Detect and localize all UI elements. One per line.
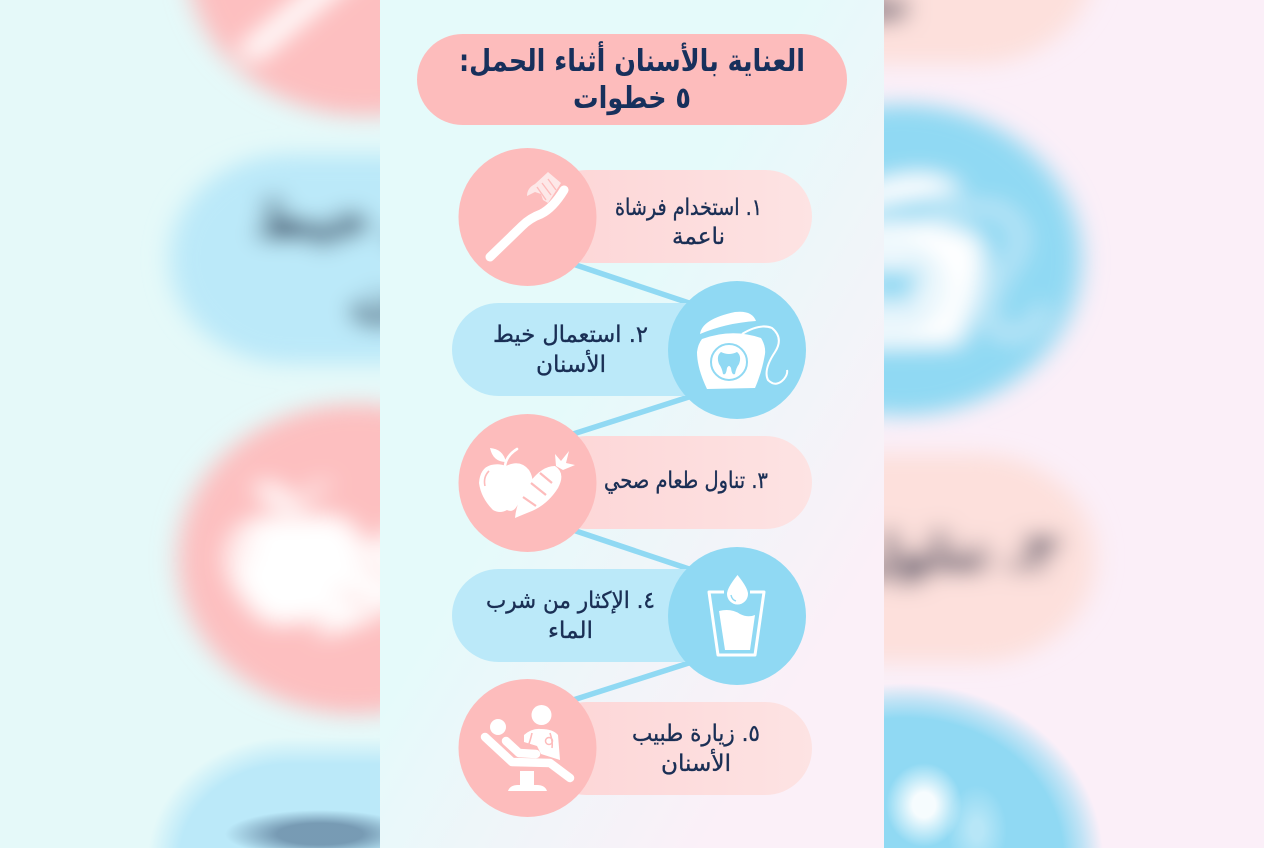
central panel: [380, 0, 884, 848]
blurred enlarged backdrop: [170, 0, 1095, 714]
icon: dental floss: [697, 312, 787, 389]
step 3 label: ٣. تناول طعام صحي: [604, 468, 768, 494]
step 2 label: ٢. استعمال خيط: [493, 322, 648, 348]
step 1 label: [540, 170, 812, 263]
step 4 circle: [668, 547, 806, 685]
step 4 label: ٤. الإكثار من شرب: [486, 588, 655, 614]
blurred backdrop: lower left pill cap: [140, 730, 290, 848]
blurred backdrop: lower left pill body: [290, 730, 390, 848]
step 1 circle: [458, 148, 596, 286]
title banner: ٥ خطوات: [573, 81, 691, 116]
blurred enlarged backdrop: ٣. تناول طعام صحي: [550, 523, 1057, 583]
title banner: العناية بالأسنان أثناء الحمل:: [459, 41, 805, 79]
step 2 label: [452, 303, 732, 396]
connector lines: [570, 263, 695, 701]
step 1 label: ناعمة: [672, 224, 725, 250]
blurred enlarged backdrop: ٢. استعمال خيط: [257, 190, 678, 250]
step 2 label: الأسنان: [536, 350, 606, 378]
step 5 circle: [458, 679, 596, 817]
blurred backdrop: glass rim glow: [945, 785, 1009, 848]
step 3 circle: [458, 414, 596, 552]
icon: dentist and patient: [485, 705, 570, 791]
blurred backdrop: lower left text smudge: [215, 805, 385, 848]
step 5 label: ٥. زيارة طبيب: [632, 721, 760, 747]
blurred backdrop: lower right circle: [650, 650, 1120, 848]
step 4 label: [452, 569, 732, 662]
blurred backdrop: water drop glow: [884, 760, 964, 848]
blurred enlarged backdrop: الأسنان: [351, 267, 604, 329]
step 4 label: الماء: [548, 618, 593, 644]
step 5 label: الأسنان: [661, 749, 731, 777]
icon: apple and carrot: [479, 448, 575, 518]
title banner: [417, 34, 847, 125]
step 3 label: [540, 436, 812, 529]
step 1 label: ١. استخدام فرشاة: [615, 195, 762, 221]
step 2 circle: [668, 281, 806, 419]
icon: toothbrush: [490, 172, 564, 257]
step 5 label: [540, 702, 812, 795]
icon: glass of water: [709, 575, 764, 655]
